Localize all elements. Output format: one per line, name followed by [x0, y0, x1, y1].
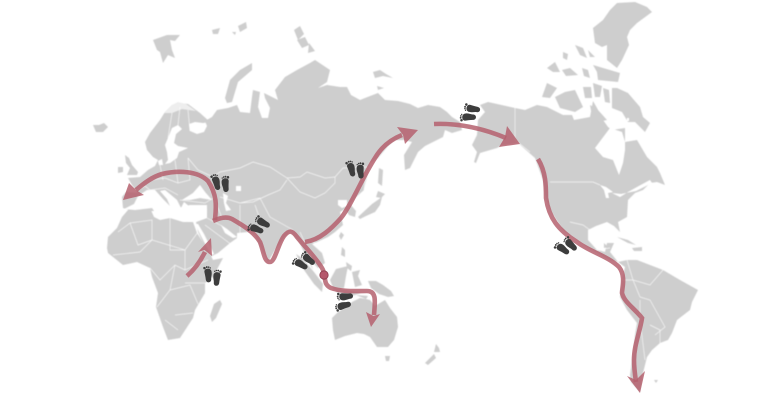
route: out of Africa	[187, 238, 212, 276]
land: Africa	[107, 208, 223, 340]
land: Arctic Scandinavia faded	[164, 102, 196, 113]
land: Eurasia	[93, 2, 698, 392]
footprints: Arabian Sea	[246, 213, 272, 238]
world map land masses	[93, 2, 698, 392]
footprints: Caucasus	[210, 171, 232, 195]
land: Canadian Arctic islands	[542, 2, 652, 138]
seas and lakes	[124, 118, 652, 255]
route: down the Americas	[538, 159, 645, 393]
route: East Asia to Siberia	[305, 127, 418, 242]
country borders	[113, 107, 665, 360]
footprints: Pacific Mexico	[552, 233, 580, 260]
land: Caribbean islands	[604, 237, 642, 251]
land: Novaya Zemlya and Svalbard	[153, 35, 252, 103]
footprints: East Africa	[203, 266, 222, 286]
land: Australia and New Zealand	[332, 298, 440, 365]
land: South America	[618, 260, 698, 392]
marker: Toba dot	[320, 271, 328, 279]
land: North America	[472, 101, 665, 262]
footprints: Bering	[459, 103, 481, 123]
footprints: Timor Sea	[332, 290, 356, 312]
route: across Beringia	[434, 124, 520, 147]
route: along southern Asia to Australia	[213, 218, 380, 327]
footprints: Manchuria	[345, 158, 367, 181]
land: Madagascar and British Isles and Iceland	[93, 123, 222, 322]
migration routes	[123, 124, 645, 393]
land: Arctic Russian islands	[212, 22, 393, 90]
route: into Europe	[123, 172, 216, 220]
footprints: Bay of Bengal	[290, 248, 318, 275]
land: Japan, Sakhalin and Southeast Asia islands	[296, 168, 394, 299]
